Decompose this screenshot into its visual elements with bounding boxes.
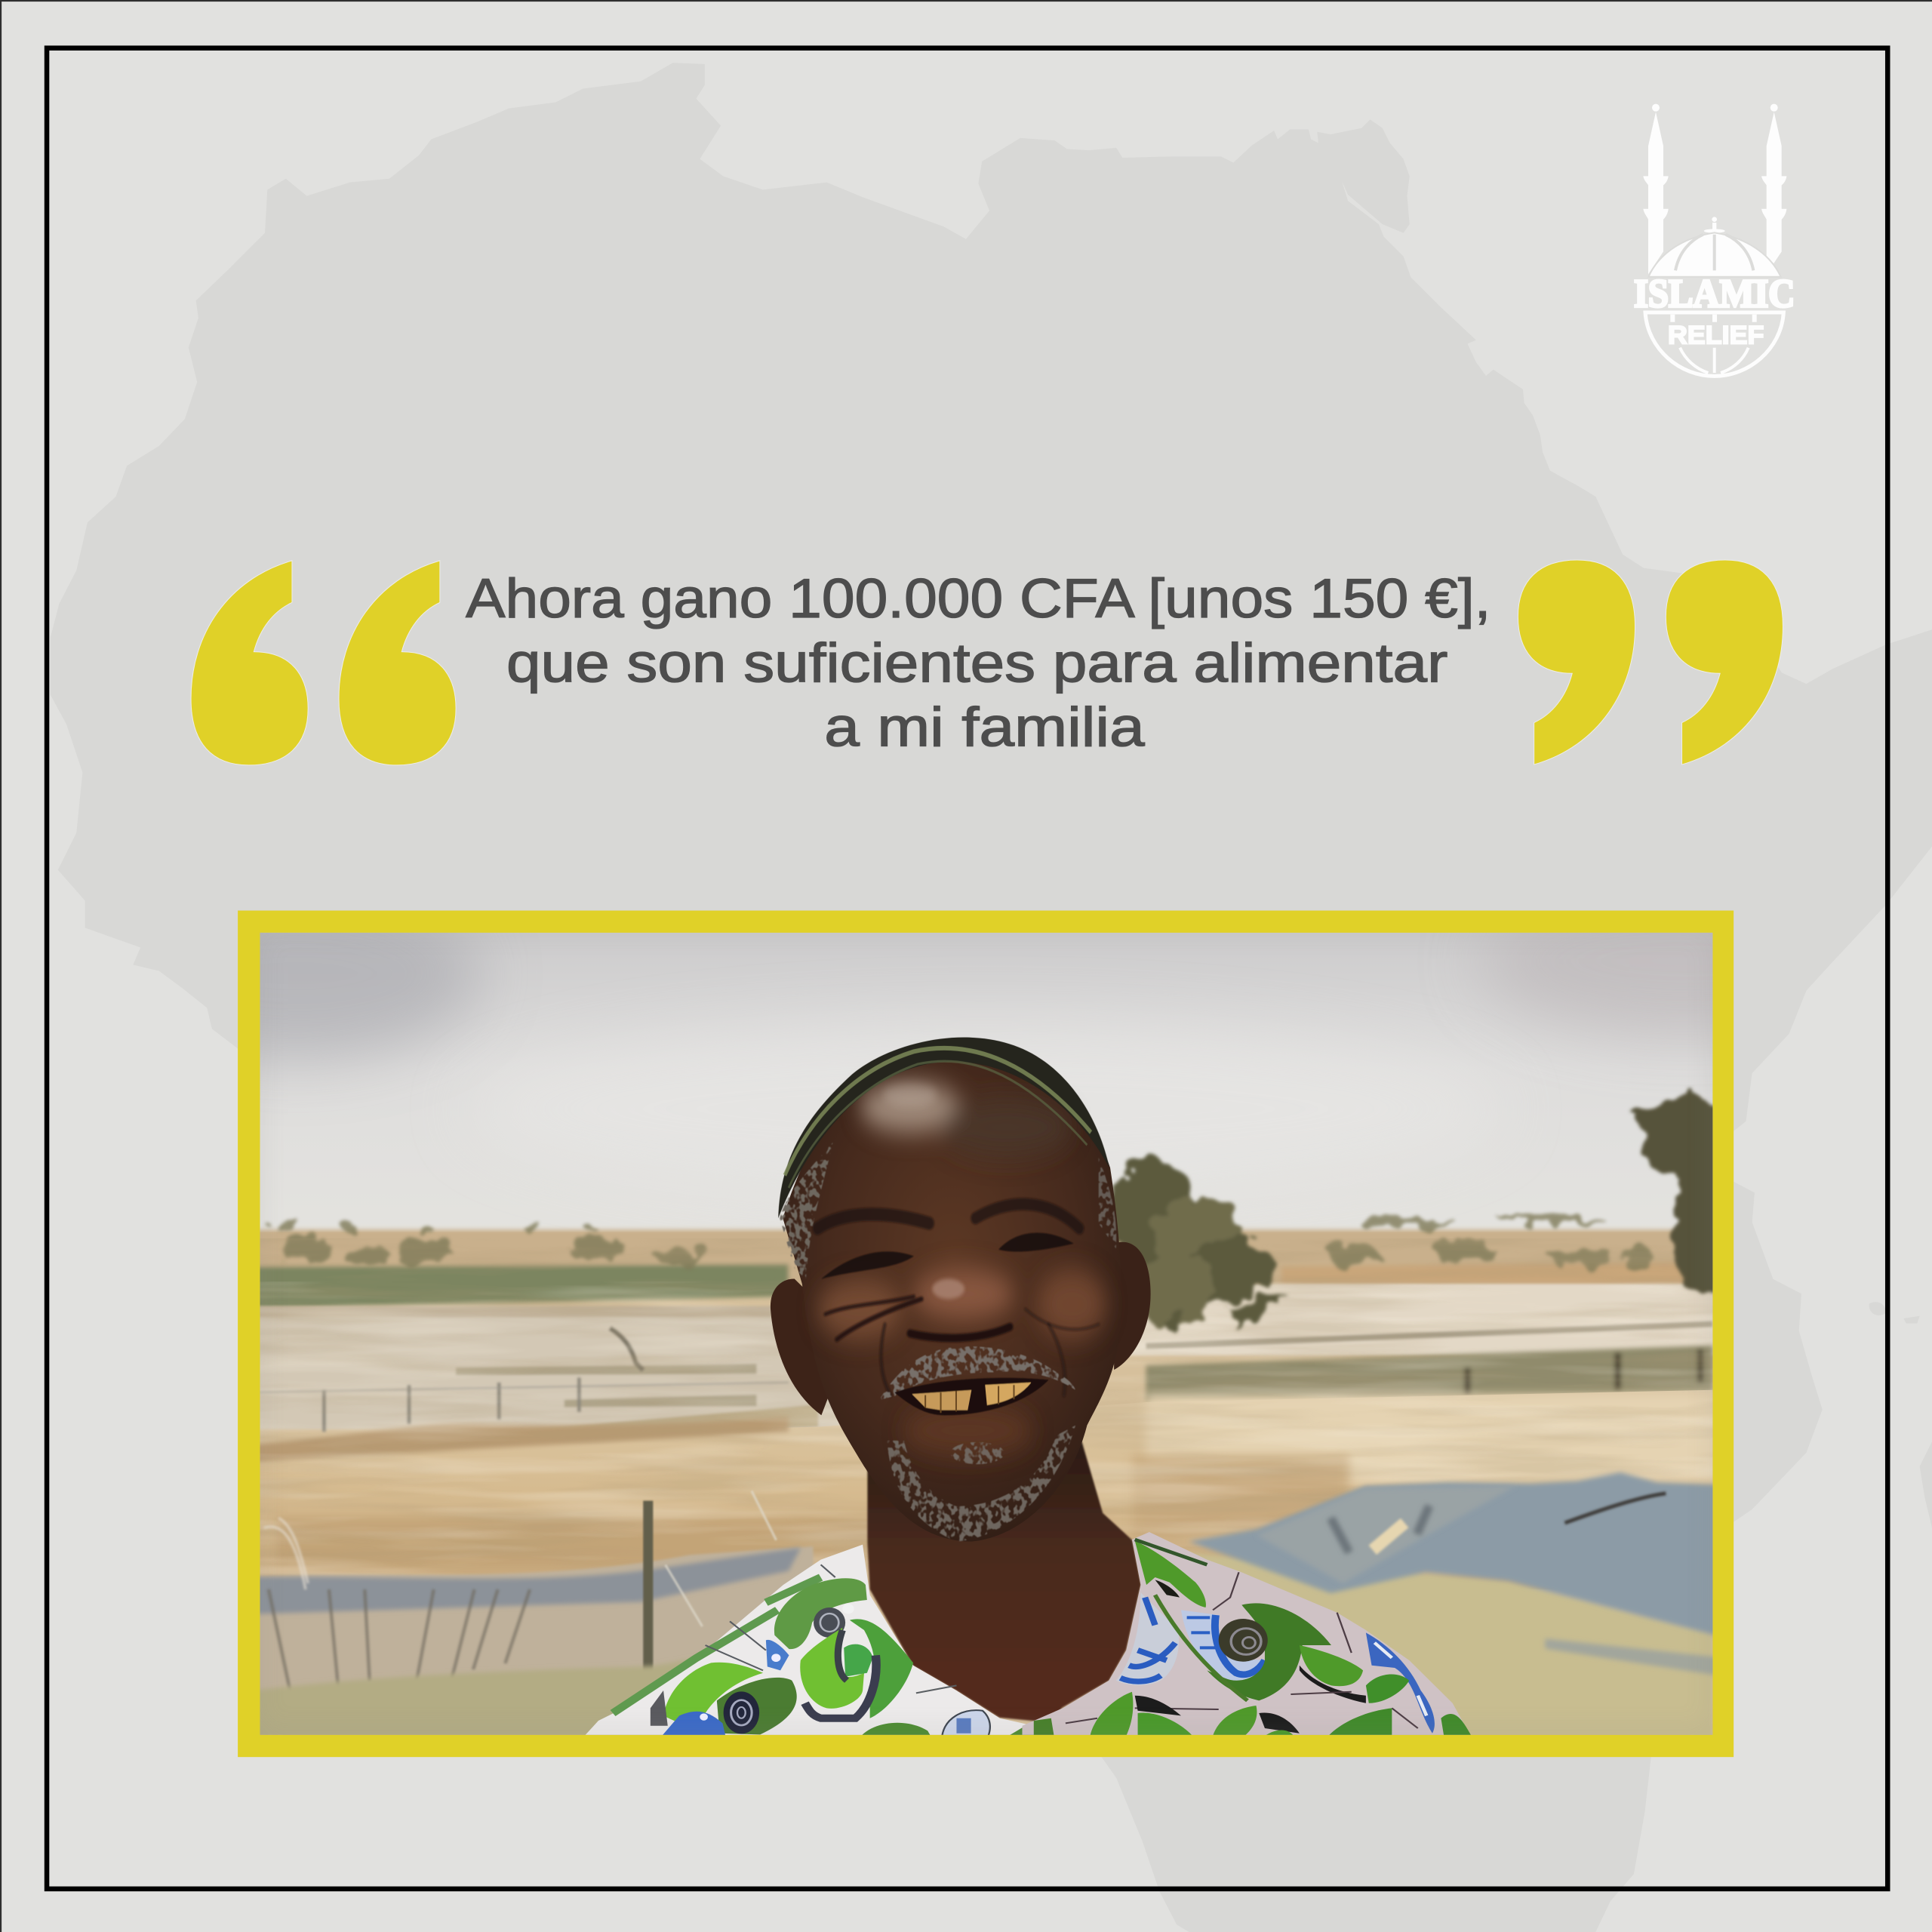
photo: cap: [778, 1038, 1109, 1218]
quote text: a mi familia: [824, 696, 1145, 758]
photo: shirt left of neck: [581, 1545, 1034, 1740]
photo: pond liner left: [253, 1491, 814, 1740]
photo: brows, eyes and wrinkles: [817, 1204, 1099, 1395]
icon: dome: [1650, 217, 1780, 276]
photo: grey beard: [887, 1426, 1075, 1542]
photo: pond liner right: [1183, 1472, 1719, 1749]
photo: vignette: [253, 924, 1719, 1737]
photo: moustache: [879, 1346, 1075, 1400]
photo: face: [783, 1052, 1121, 1542]
icon: globe: [1645, 312, 1783, 376]
quote text: [466, 567, 1491, 758]
photo: sandy ground: [260, 1281, 1713, 1582]
photo: right ear: [1114, 1242, 1151, 1370]
photo: left ear: [771, 1279, 833, 1415]
logo wordmark: RELIEF: RELIEF: [1668, 321, 1764, 350]
photo: skin highlights: [817, 1081, 1106, 1456]
photo: pale dry lake: [253, 1284, 1719, 1437]
photo: chin tuft: [950, 1442, 1004, 1464]
photo: greying hair: [780, 1143, 833, 1279]
logo: Islamic Relief: [1634, 104, 1795, 376]
icon: left minaret: [1643, 104, 1669, 274]
photo: hair right: [1099, 1158, 1116, 1248]
photo: shirt right of neck: [1022, 1532, 1472, 1740]
icon: closing quotation marks: [1518, 560, 1783, 764]
photo: right fence strip: [1146, 1346, 1712, 1402]
logo wordmark: ISLAMIC: ISLAMIC: [1634, 271, 1795, 316]
icon: right minaret: [1761, 104, 1786, 274]
photo frame: [238, 911, 1734, 1757]
photo: distant dunes: [253, 1229, 1719, 1309]
photo: sky: [260, 933, 1713, 1232]
photo: man's head: [771, 1038, 1151, 1542]
icon: opening quotation marks: [191, 561, 456, 765]
quote text: que son suficientes para alimentar: [506, 632, 1447, 694]
photo: smiling farmer beside a lined pond: [260, 933, 1713, 1735]
photo: forehead shine: [883, 1083, 937, 1106]
photo: acacia tree centre: [1110, 1159, 1284, 1336]
photo: acacia tree right: [1628, 1085, 1713, 1297]
photo: dune scrub: [273, 1215, 1656, 1266]
quote text: Ahora gano 100.000 CFA [unos 150 €],: [466, 567, 1491, 629]
photo: right eye: [998, 1232, 1074, 1251]
photo: ground base: [260, 1293, 1713, 1735]
photo: man's neck: [867, 1441, 1141, 1722]
photo: left eye: [821, 1251, 914, 1279]
photo: smile and teeth: [894, 1378, 1048, 1415]
